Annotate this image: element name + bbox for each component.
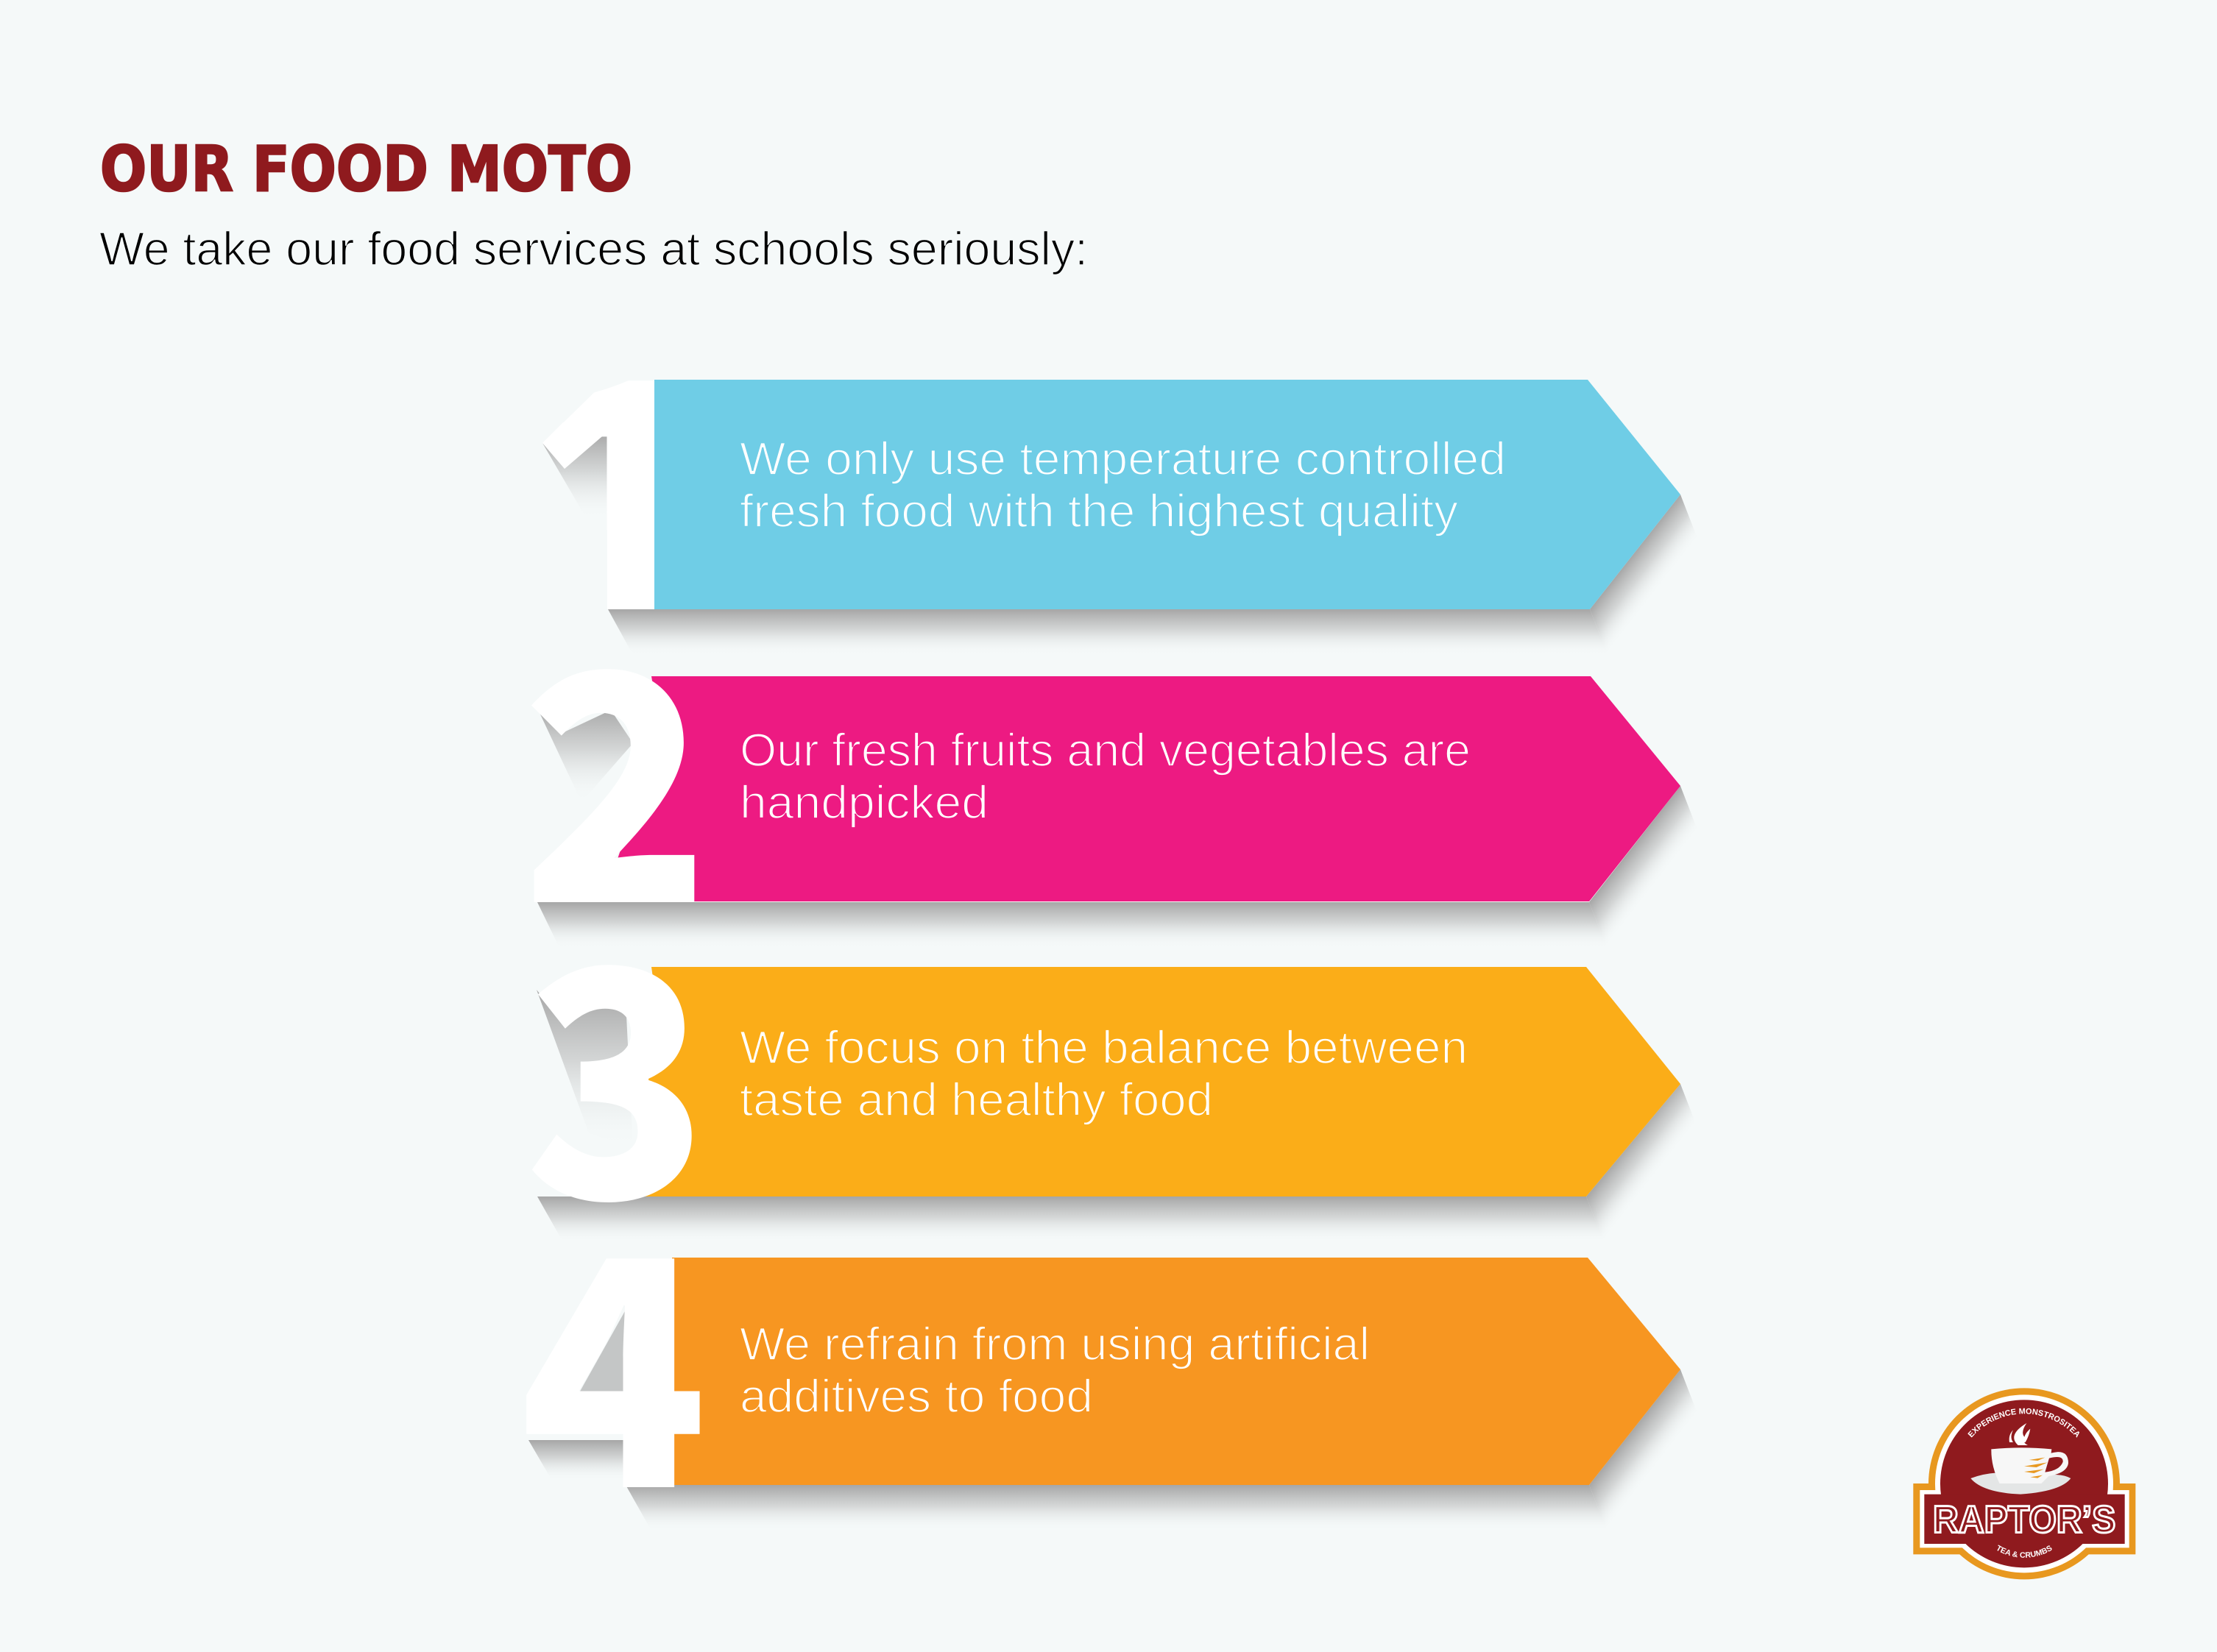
- logo subline: TEA & CRUMBS: [1998, 1545, 2052, 1558]
- icon: steaming cup: [1970, 1423, 2071, 1495]
- numeral 3: 3: [525, 832, 708, 1289]
- text: item 2: Our fresh fruits and vegetables are: [740, 725, 1471, 776]
- logo: Raptor's: [1913, 1388, 2136, 1579]
- panel: item 1: [542, 380, 1693, 643]
- panel: item 4: [520, 1122, 1698, 1578]
- numeral 1: 1: [500, 244, 776, 700]
- panel: item 3: [525, 832, 1698, 1289]
- text: item 3: taste and healthy food: [740, 1074, 1213, 1126]
- numeral 2: 2: [521, 537, 710, 993]
- panel: item 2: [521, 537, 1698, 993]
- subtitle: We take our food services at schools seriously:: [99, 222, 1088, 275]
- logo tagline: EXPERIENCE MONSTROSITEA: [1967, 1408, 2080, 1438]
- title: OUR FOOD MOTO: [100, 133, 632, 206]
- text: item 1: fresh food with the highest quality: [740, 486, 1459, 537]
- text: item 1: We only use temperature controlled: [740, 433, 1506, 485]
- logo name: RAPTOR’S: [1933, 1498, 2115, 1541]
- text: item 4: additives to food: [740, 1371, 1093, 1422]
- text: item 3: We focus on the balance between: [740, 1022, 1468, 1074]
- text: item 4: We refrain from using artificial: [740, 1319, 1370, 1370]
- text: item 2: handpicked: [740, 777, 989, 829]
- numeral 4: 4: [520, 1122, 707, 1578]
